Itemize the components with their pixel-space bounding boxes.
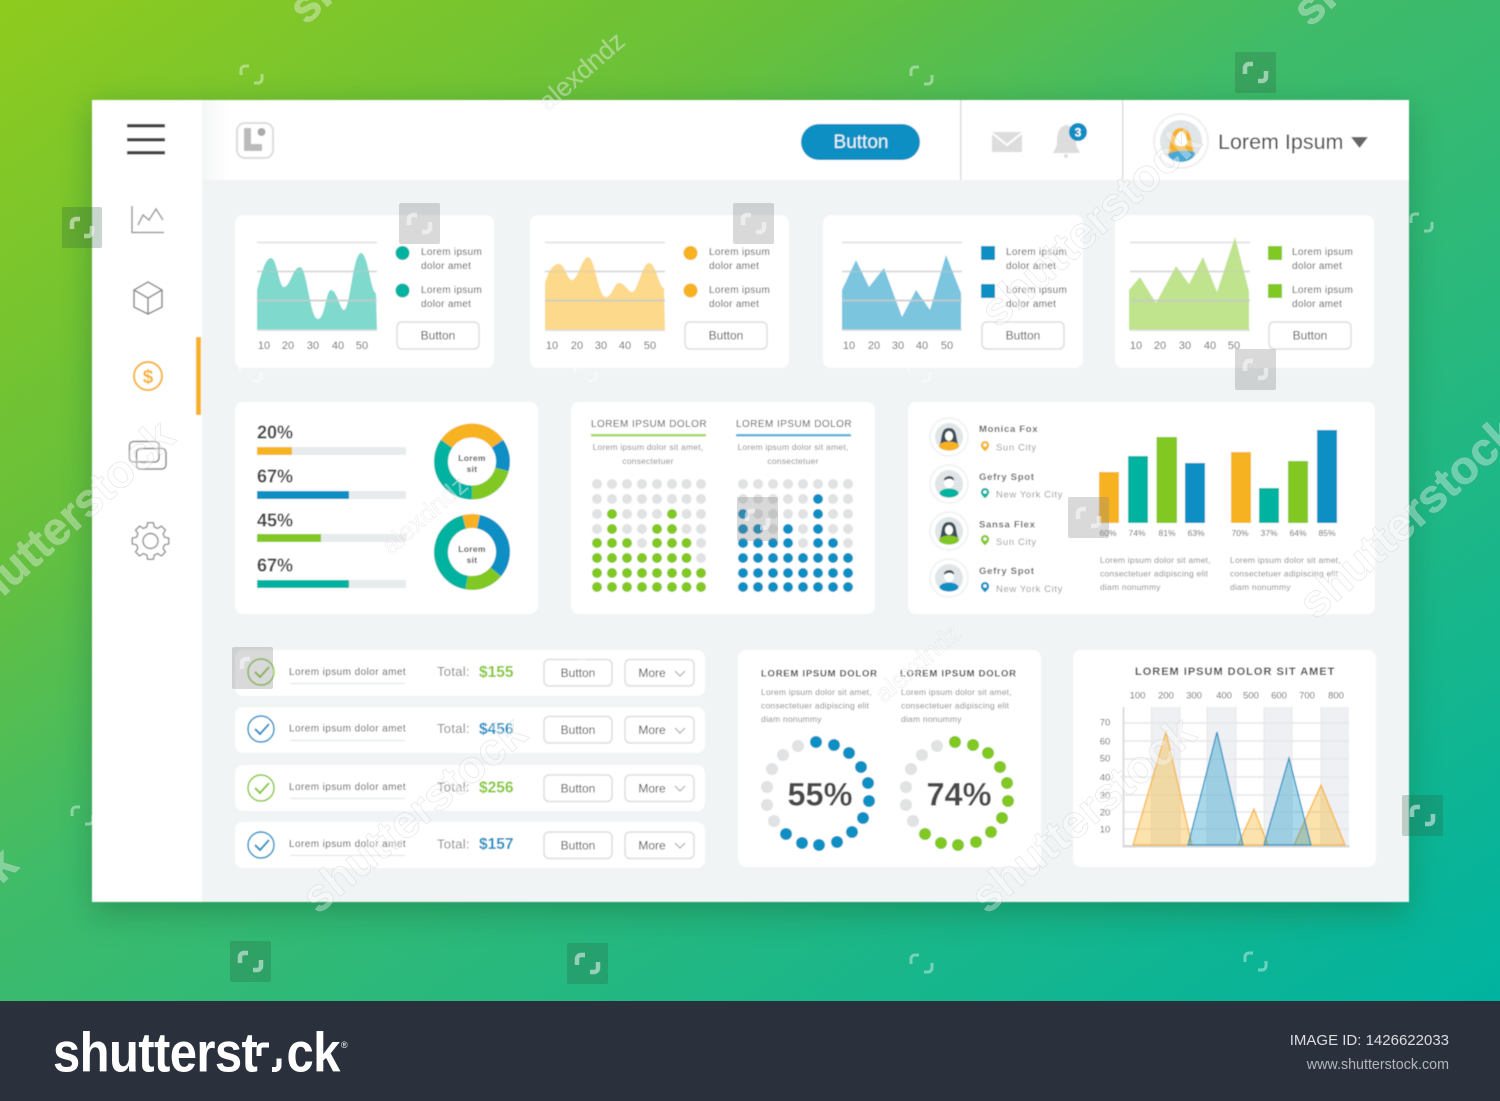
green column heading bbox=[591, 419, 707, 466]
plot grid bbox=[1122, 707, 1350, 848]
person: Gefry Spot teal: New York City bbox=[996, 490, 1063, 500]
person: Monica Fox bbox=[930, 418, 1038, 456]
right heading and text: consectetuer adipiscing elit bbox=[901, 700, 1010, 710]
donut chart 1: Lorem bbox=[458, 453, 486, 463]
more dropdown bbox=[625, 775, 694, 802]
bar chart left: 63% bbox=[1187, 528, 1205, 538]
green column heading: LOREM IPSUM DOLOR bbox=[591, 419, 707, 430]
button bbox=[982, 322, 1064, 349]
site url: www.shutterstock.com bbox=[1306, 1057, 1449, 1073]
legend: dolor amet bbox=[421, 299, 471, 310]
button bbox=[544, 716, 612, 743]
progress bar 67% teal: 67% bbox=[257, 556, 293, 576]
legend bbox=[981, 246, 1067, 310]
right heading and text: Lorem ipsum dolor sit amet, bbox=[901, 687, 1012, 697]
bar chart caption left: diam nonummy bbox=[1100, 582, 1161, 592]
list row 1: Lorem ipsum dolor amet bbox=[289, 667, 406, 678]
person: Sansa Flex: Sun City bbox=[996, 537, 1037, 548]
user avatar bbox=[1154, 114, 1208, 168]
list row 2: Lorem ipsum dolor amet bbox=[289, 724, 406, 734]
progress bar 45% bbox=[257, 510, 406, 542]
bar chart left bbox=[1099, 437, 1205, 538]
button bbox=[544, 660, 612, 686]
y axis labels: 70 bbox=[1100, 718, 1110, 728]
legend: dolor amet bbox=[421, 261, 471, 272]
left heading and text bbox=[761, 668, 878, 724]
y axis labels: 30 bbox=[1100, 790, 1110, 802]
bar chart right: 64% bbox=[1289, 528, 1307, 538]
icon: cube bbox=[134, 282, 162, 314]
footer logo: shutterstock bbox=[53, 1022, 341, 1084]
list row 4 bbox=[235, 822, 705, 868]
legend: dolor amet bbox=[1292, 299, 1342, 310]
legend: dolor amet bbox=[1006, 299, 1056, 310]
list row 2 bbox=[235, 707, 705, 753]
progress bar 20%: 20% bbox=[257, 422, 293, 442]
legend: Lorem ipsum bbox=[1006, 285, 1067, 296]
list row 3: $256 bbox=[479, 780, 514, 796]
area chart: 30 bbox=[892, 340, 904, 352]
person: Gefry Spot blue: Gefry Spot bbox=[979, 566, 1035, 577]
donut chart 1: sit bbox=[467, 464, 477, 474]
progress bar 67% teal bbox=[257, 556, 406, 588]
radial dots 55%: 55% bbox=[787, 776, 853, 812]
x axis labels bbox=[1130, 690, 1344, 702]
footer bar bbox=[0, 1001, 1500, 1101]
icon: check bbox=[248, 832, 274, 858]
bar chart right: 70% bbox=[1231, 528, 1249, 538]
bar chart caption left: Lorem ipsum dolor sit amet, bbox=[1100, 555, 1211, 565]
y axis labels: 60 bbox=[1100, 736, 1110, 748]
watermark: stock logo squares bbox=[62, 52, 1443, 984]
chart title: LOREM IPSUM DOLOR SIT AMET bbox=[1135, 666, 1335, 678]
left heading and text: consectetuer adipiscing elit bbox=[761, 700, 870, 710]
button bbox=[685, 322, 767, 349]
left heading and text: diam nonummy bbox=[761, 714, 822, 724]
panel: dot matrix bbox=[571, 402, 875, 614]
green dot matrix bbox=[592, 479, 706, 592]
bar chart right bbox=[1231, 430, 1337, 538]
legend: Lorem ipsum bbox=[1006, 247, 1067, 258]
icon: check bbox=[248, 716, 274, 742]
watermark: alexdndz text: alexdndz bbox=[375, 470, 473, 561]
bar chart left: 81% bbox=[1158, 528, 1176, 538]
list row 3: Lorem ipsum dolor amet bbox=[289, 782, 406, 793]
x axis labels: 100 bbox=[1130, 690, 1145, 702]
list row 4: $157 bbox=[479, 836, 513, 853]
y axis labels: 10 bbox=[1100, 824, 1110, 836]
left heading and text: LOREM IPSUM DOLOR bbox=[761, 668, 878, 680]
dashboard drop shadow bbox=[92, 108, 1409, 914]
icon: mail bbox=[992, 132, 1022, 152]
active indicator bbox=[196, 337, 201, 415]
legend: Lorem ipsum bbox=[1292, 247, 1353, 258]
area chart: 40 bbox=[916, 340, 928, 352]
legend: dolor amet bbox=[1006, 261, 1056, 272]
progress bar 20% bbox=[257, 422, 406, 455]
button: Button bbox=[561, 782, 595, 796]
list row 4: Lorem ipsum dolor amet bbox=[289, 839, 406, 850]
primary button bbox=[801, 124, 920, 160]
area chart: 10 bbox=[546, 340, 558, 352]
panel: teal area chart bbox=[235, 215, 494, 368]
person: Sansa Flex: Sansa Flex bbox=[979, 520, 1036, 530]
image id: IMAGE ID: 1426622033 bbox=[1290, 1032, 1449, 1049]
sidebar bbox=[92, 100, 202, 902]
area chart bbox=[545, 242, 665, 352]
list row 1: Total: bbox=[437, 664, 470, 679]
x axis labels: 700 bbox=[1299, 690, 1315, 702]
x axis labels: 300 bbox=[1186, 690, 1202, 702]
blue column heading bbox=[736, 419, 852, 466]
legend: Lorem ipsum bbox=[709, 247, 770, 258]
button: Button bbox=[1006, 328, 1040, 342]
watermark: alexdndz text: alexdndz bbox=[868, 618, 966, 709]
button: Button bbox=[561, 723, 595, 737]
button bbox=[544, 775, 612, 802]
list row 2: Total: bbox=[437, 721, 470, 736]
person: Gefry Spot blue bbox=[930, 559, 1063, 597]
bar chart right: 37% bbox=[1260, 528, 1278, 538]
icon: notification bell bbox=[1053, 123, 1087, 158]
person: Gefry Spot teal: Gefry Spot bbox=[979, 472, 1035, 483]
watermark: alexdndz text: alexdndz bbox=[532, 26, 630, 117]
x axis labels: 200 bbox=[1158, 690, 1174, 702]
radial dots 74% bbox=[900, 736, 1014, 851]
button: Button bbox=[421, 328, 455, 342]
radial dots 55% bbox=[761, 736, 875, 851]
y axis labels: 40 bbox=[1100, 772, 1110, 784]
person: Gefry Spot teal bbox=[930, 465, 1063, 503]
legend: Lorem ipsum bbox=[421, 285, 482, 296]
legend: Lorem ipsum bbox=[709, 285, 770, 296]
area chart: 10 bbox=[258, 340, 270, 352]
bar chart right: 85% bbox=[1318, 528, 1336, 538]
icon: dollar: $ bbox=[143, 367, 154, 388]
list row 3: Total: bbox=[437, 780, 470, 794]
area chart: 20 bbox=[868, 340, 880, 352]
area chart: 20 bbox=[571, 340, 583, 352]
legend: dolor amet bbox=[709, 261, 759, 272]
more dropdown bbox=[625, 832, 694, 858]
y axis labels: 50 bbox=[1100, 754, 1110, 764]
bar chart caption right: Lorem ipsum dolor sit amet, bbox=[1230, 555, 1341, 565]
right heading and text bbox=[900, 668, 1017, 724]
area chart: 50 bbox=[644, 340, 656, 352]
bar chart left: 74% bbox=[1128, 528, 1146, 538]
icon: gear bbox=[132, 523, 169, 559]
green column heading: consectetuer bbox=[622, 456, 674, 466]
button: Button bbox=[709, 328, 743, 342]
y axis labels bbox=[1100, 718, 1110, 836]
icon: check bbox=[248, 775, 274, 801]
blue dot matrix bbox=[738, 479, 853, 592]
dashboard window bbox=[92, 100, 1409, 902]
bar chart caption right bbox=[1230, 555, 1341, 592]
orange triangles bbox=[1133, 732, 1345, 845]
y axis labels: 20 bbox=[1100, 808, 1110, 818]
footer logo: ® bbox=[341, 1040, 348, 1050]
more dropdown: More bbox=[638, 723, 666, 737]
person: Monica Fox: Monica Fox bbox=[979, 424, 1038, 435]
icon: check bbox=[248, 659, 274, 685]
person: Monica Fox: Sun City bbox=[996, 442, 1037, 454]
x axis labels: 600 bbox=[1271, 690, 1287, 702]
top bar bbox=[202, 100, 1409, 180]
area chart: 50 bbox=[941, 340, 953, 352]
blue column heading: LOREM IPSUM DOLOR bbox=[736, 419, 852, 430]
list row 1: $155 bbox=[479, 664, 514, 681]
area chart bbox=[1129, 237, 1250, 352]
area chart: 50 bbox=[1228, 340, 1240, 352]
donut chart 1 bbox=[429, 418, 515, 505]
button bbox=[397, 322, 479, 349]
icon: chat bbox=[130, 442, 166, 469]
blue triangles bbox=[1188, 732, 1311, 845]
watermark: alexdndz text bbox=[375, 26, 966, 709]
x axis labels: 500 bbox=[1243, 690, 1259, 702]
right heading and text: diam nonummy bbox=[901, 714, 962, 724]
icon: line chart bbox=[132, 206, 164, 232]
bar chart caption left bbox=[1100, 555, 1211, 592]
button bbox=[544, 832, 612, 858]
area chart: 10 bbox=[1130, 340, 1142, 352]
area chart: 40 bbox=[332, 340, 344, 352]
area chart: 20 bbox=[1154, 340, 1166, 352]
panel: triangle area chart bbox=[1073, 650, 1376, 867]
donut chart 2: sit bbox=[467, 555, 477, 565]
more dropdown: More bbox=[638, 666, 666, 680]
area chart bbox=[257, 242, 377, 352]
user name: Lorem Ipsum bbox=[1218, 130, 1343, 154]
watermark: shutterstock text: shutterstock bbox=[970, 113, 1210, 336]
blue column heading: consectetuer bbox=[767, 456, 819, 466]
legend bbox=[1268, 246, 1353, 310]
person: Sansa Flex bbox=[930, 512, 1037, 550]
more dropdown bbox=[625, 716, 694, 743]
panel: progress bars and donuts bbox=[235, 402, 538, 614]
panel: green area chart bbox=[1115, 215, 1374, 368]
bar chart caption left: consectetuer adipiscing elit bbox=[1100, 568, 1209, 578]
panel: radial progress bbox=[738, 650, 1041, 867]
blue column heading: Lorem ipsum dolor sit amet, bbox=[738, 442, 848, 452]
list row 3 bbox=[235, 765, 705, 811]
area chart bbox=[842, 242, 962, 352]
panel: orange area chart bbox=[530, 215, 789, 368]
legend: Lorem ipsum bbox=[1292, 285, 1353, 296]
area chart: 20 bbox=[282, 340, 294, 352]
progress bar 45%: 45% bbox=[257, 510, 293, 530]
area chart: 10 bbox=[843, 340, 855, 352]
legend: Lorem ipsum bbox=[421, 247, 482, 258]
progress bar 67% blue: 67% bbox=[257, 466, 293, 486]
x axis labels: 400 bbox=[1216, 690, 1232, 702]
x axis labels: 800 bbox=[1328, 690, 1344, 702]
donut chart 2: Lorem bbox=[458, 544, 486, 554]
icon: dollar bbox=[134, 362, 162, 390]
area chart: 30 bbox=[595, 340, 607, 352]
bar chart caption right: diam nonummy bbox=[1230, 582, 1291, 592]
area chart: 30 bbox=[1179, 340, 1191, 352]
right heading and text: LOREM IPSUM DOLOR bbox=[900, 668, 1017, 680]
more dropdown bbox=[625, 660, 694, 686]
person: Gefry Spot blue: New York City bbox=[996, 584, 1063, 595]
list row 2: $456 bbox=[479, 721, 514, 738]
legend bbox=[684, 246, 770, 310]
donut chart 2 bbox=[428, 508, 516, 596]
logo bbox=[237, 123, 273, 158]
button: Button bbox=[561, 838, 595, 852]
more dropdown: More bbox=[638, 782, 666, 796]
list row 4: Total: bbox=[437, 836, 470, 852]
legend: dolor amet bbox=[1292, 261, 1342, 272]
watermark: shutterstock text: shutterstock bbox=[291, 705, 536, 923]
panel: people and bar charts bbox=[908, 402, 1375, 614]
button bbox=[1269, 322, 1351, 349]
icon: menu bbox=[127, 124, 165, 154]
area chart: 40 bbox=[619, 340, 631, 352]
icon: dropdown arrow bbox=[1351, 137, 1368, 148]
area chart: 40 bbox=[1204, 340, 1216, 352]
bar chart left: 60% bbox=[1099, 528, 1117, 538]
panel: blue area chart bbox=[823, 215, 1083, 368]
area chart: 30 bbox=[307, 340, 319, 352]
left heading and text: Lorem ipsum dolor sit amet, bbox=[761, 687, 872, 697]
radial dots 74%: 74% bbox=[926, 776, 992, 812]
primary button: Button bbox=[834, 132, 888, 153]
watermark: shutterstock text: shutterstock bbox=[960, 705, 1205, 923]
bar chart caption right: consectetuer adipiscing elit bbox=[1230, 568, 1339, 578]
button: Button bbox=[561, 666, 595, 680]
progress bar 67% blue bbox=[257, 466, 406, 499]
green column heading: Lorem ipsum dolor sit amet, bbox=[593, 442, 703, 452]
area chart: 50 bbox=[356, 340, 368, 352]
more dropdown: More bbox=[638, 838, 666, 852]
icon: notification bell: 3 bbox=[1075, 126, 1082, 140]
list row 1 bbox=[235, 650, 705, 696]
legend: dolor amet bbox=[709, 299, 759, 310]
button: Button bbox=[1293, 328, 1327, 342]
legend bbox=[396, 246, 482, 310]
